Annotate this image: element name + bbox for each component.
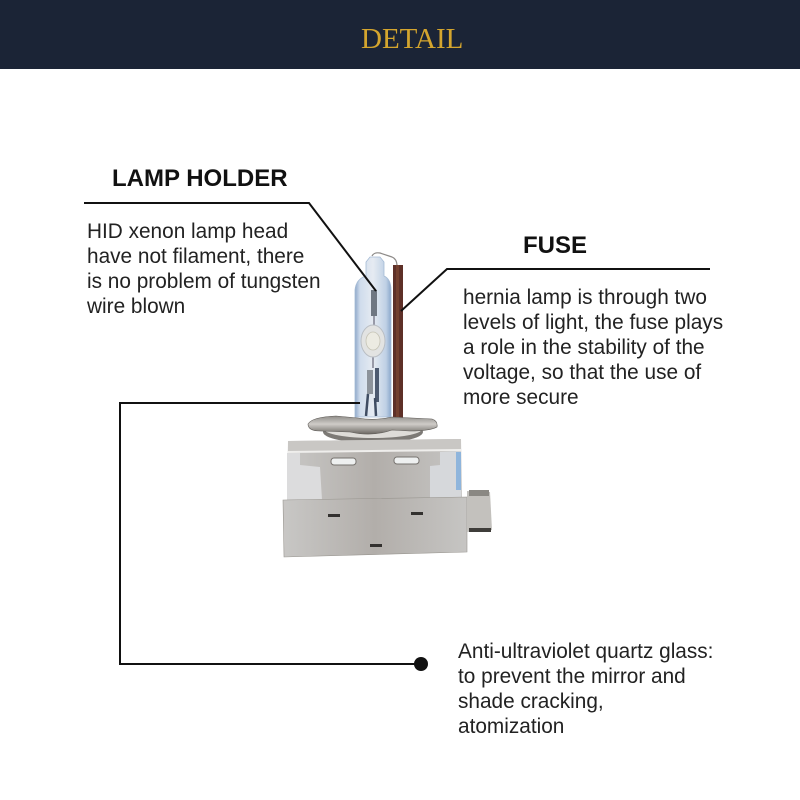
text: lamp holder description: [87, 220, 321, 318]
text: quartz glass description: Anti-ultraviolet quartz glass:: [458, 640, 713, 663]
fuse rod: [393, 265, 403, 419]
electrodes and arc chamber: [371, 290, 377, 316]
wire: [372, 253, 397, 266]
glass tube: [355, 257, 391, 417]
header bar: [0, 0, 800, 69]
text: quartz glass description: to prevent the mirror and: [458, 665, 686, 688]
text: fuse description: hernia lamp is through two: [463, 286, 707, 309]
text: lamp holder description: wire blown: [87, 295, 185, 318]
leader end dot: [414, 657, 428, 671]
lamp holder leader line: [84, 203, 376, 291]
heading: lamp holder: LAMP HOLDER: [112, 165, 288, 192]
lower housing: [283, 497, 467, 557]
connector: [467, 491, 492, 532]
quartz glass leader line: [120, 403, 421, 664]
text: quartz glass description: shade cracking,: [458, 690, 604, 713]
text: quartz glass description: atomization: [458, 715, 564, 738]
text: lamp holder description: is no problem of tungsten: [87, 270, 321, 293]
text: quartz glass description: [458, 640, 713, 738]
text: lamp holder description: HID xenon lamp head: [87, 220, 288, 243]
flange: [323, 421, 423, 443]
title: DETAIL: [361, 23, 463, 55]
text: fuse description: [463, 286, 723, 409]
text: fuse description: voltage, so that the use of: [463, 361, 701, 384]
upper housing: [287, 439, 462, 500]
text: fuse description: a role in the stability of the: [463, 336, 705, 359]
text: fuse description: levels of light, the fuse plays: [463, 311, 723, 334]
text: fuse description: more secure: [463, 386, 579, 409]
text: lamp holder description: have not filament, there: [87, 245, 304, 268]
fuse leader line: [401, 269, 710, 311]
heading: fuse: FUSE: [523, 232, 587, 259]
